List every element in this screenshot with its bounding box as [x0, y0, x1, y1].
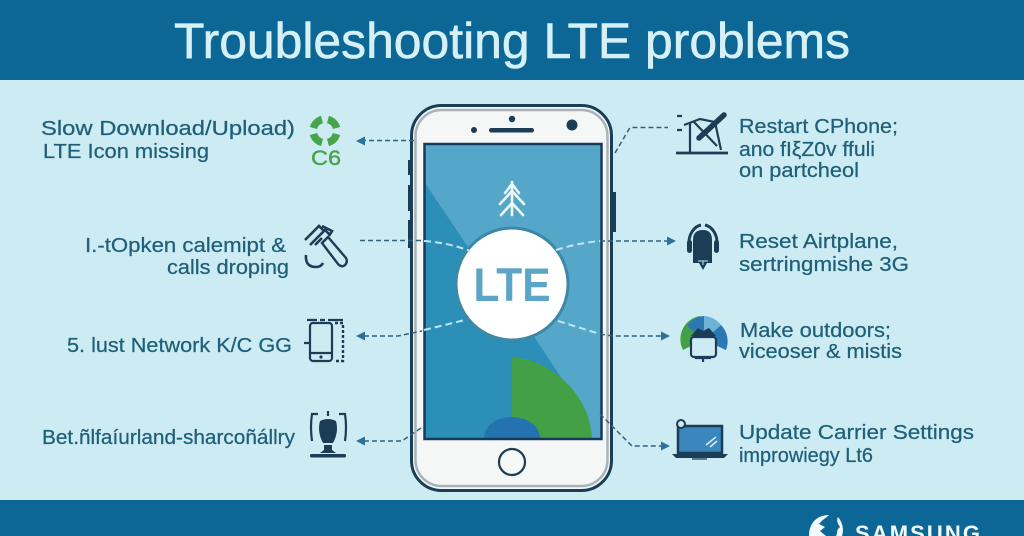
home button — [499, 449, 525, 475]
screen — [424, 144, 602, 439]
icon: phone with signal — [304, 320, 343, 361]
title: Troubleshooting LTE problems — [174, 13, 850, 69]
LTE badge: LTE — [474, 258, 550, 311]
text: update carrier: improwiegy Lt6 — [739, 444, 873, 467]
text: calls dropping: I.-tOpken calemipt & — [85, 234, 286, 257]
connector: lower left — [356, 428, 421, 446]
icon: pie gauge with monitor — [680, 316, 728, 362]
connector: upper left — [356, 136, 414, 146]
text: make outdoors — [739, 319, 902, 363]
earpiece and cameras — [471, 116, 578, 133]
icon: laptop — [672, 420, 728, 460]
text: make outdoors: viceoser & mistis — [739, 340, 902, 363]
icon: green recycle C6 — [311, 120, 341, 170]
text: update carrier: Update Carrier Settings — [739, 421, 974, 444]
text: restart phone — [739, 115, 898, 182]
icon: headset device — [687, 225, 719, 270]
title banner — [0, 0, 1024, 80]
text: restart phone: on partcheol — [739, 159, 859, 182]
phone body — [412, 106, 612, 490]
text: calls dropping — [85, 234, 289, 279]
phone illustration — [408, 106, 616, 490]
blue shape — [484, 417, 540, 438]
connector: upper right — [615, 128, 668, 153]
text: slow download: LTE Icon missing — [43, 140, 209, 163]
text: slow download — [41, 117, 295, 163]
text: restart phone: ano fIξZ0v ffuli — [739, 138, 875, 161]
text: restart phone: Restart CPhone; — [739, 115, 898, 138]
LTE badge — [456, 228, 568, 340]
icon: brand logo — [809, 515, 843, 536]
text: reset airplane: sertringmishe 3G — [739, 253, 909, 276]
connector: lower right — [600, 414, 670, 450]
text: reset airplane — [739, 230, 909, 276]
text: reset airplane: Reset Airtplane, — [739, 230, 898, 253]
text: make outdoors: Make outdoors; — [740, 319, 891, 342]
connector: third right — [558, 321, 670, 340]
connector: second left — [360, 240, 470, 251]
text: bottom left item: Bet.ñlfaíurland-sharcoñállry — [42, 426, 296, 449]
text: calls dropping: calls droping — [167, 256, 289, 279]
text: slow download: Slow Download/Upload) — [41, 117, 295, 140]
footer banner — [0, 500, 1024, 536]
connector: third left — [356, 320, 465, 340]
icon: green recycle C6: C6 — [311, 147, 341, 170]
green shape — [512, 357, 592, 438]
text: update carrier — [739, 421, 974, 467]
icon: pod on stand — [310, 411, 346, 458]
side buttons — [408, 160, 616, 248]
icon: hammer — [305, 226, 347, 267]
text: network: 5. lust Network K/C GG — [67, 334, 292, 357]
connector: second right — [556, 236, 676, 250]
icon: tree antenna — [500, 182, 524, 215]
icon: crossed tower — [676, 115, 728, 153]
